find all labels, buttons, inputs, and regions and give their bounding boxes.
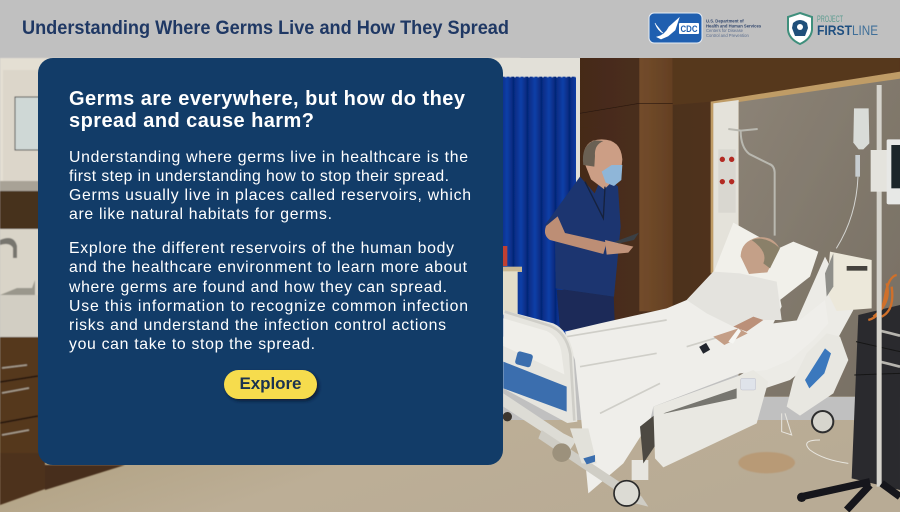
cable on floor [782,413,848,463]
first paragraph: Germs usually live in places called reservoirs, which [69,187,471,204]
mask [602,165,622,186]
pillow [713,223,818,300]
floor [0,420,900,512]
patient head [741,237,780,274]
first paragraph: first step in understanding how to stop their spread. [69,168,449,185]
healthcare worker [545,139,639,330]
panel heading: Germs are everywhere, but how do they [69,88,466,110]
second paragraph: Explore the different reservoirs of the human body [69,240,454,257]
main text panel [38,58,503,465]
CDC logo: Health and Human Services [706,24,762,28]
Project Firstline logo [788,13,878,44]
arms [545,216,607,254]
Explore button: Explore [240,374,302,393]
tablet [615,233,639,243]
CDC logo: Centers for Disease [706,28,744,33]
right scene drawn in zoomed coordinates [500,58,900,510]
bed alcove wall [739,79,900,397]
bedside side table [503,246,522,315]
CDC logo [649,13,762,43]
dark drawer unit [852,305,900,490]
bed alcove frame [711,72,900,397]
IV pole and stand [797,85,900,510]
legs [557,287,615,330]
Project Firstline logo: FIRST [817,22,852,38]
left kitchen counter and cabinets [0,58,520,505]
upper wall [500,58,582,331]
Explore button [224,370,319,401]
floor light patch [738,452,795,473]
bed head mattress [733,257,853,390]
wall rail [728,129,775,236]
Project Firstline logo: PROJECT [817,14,843,25]
header bar [0,0,900,57]
foot mattress [503,318,573,373]
first paragraph [69,149,471,223]
headwall outlets [718,149,736,213]
IV bag and tube [836,108,869,248]
Project Firstline logo: LINE [852,22,878,38]
scrub top [545,173,621,297]
panel heading [69,88,466,132]
bed undercarriage and wheels [503,393,833,507]
foot board [503,310,577,423]
head [583,139,622,189]
patient gown and sheets [565,272,828,493]
title: Understanding Where Germs Live and How They Spread [22,18,509,39]
second paragraph: risks and understand the infection control actions [69,317,446,334]
first paragraph: are like natural habitats for germs. [69,206,332,223]
headwall column [713,100,739,273]
CDC logo: U.S. Department of [706,18,744,24]
CDC logo: CDC [680,24,698,34]
second paragraph: and the healthcare environment to learn more about [69,259,468,276]
patient monitor [871,139,900,204]
CDC logo: Control and Prevention [706,33,750,38]
wood wall panels [580,58,900,345]
head control panel [787,333,848,416]
first paragraph: Understanding where germs live in healthcare is the [69,149,468,166]
bed side rail [653,370,768,467]
blue curtain [500,77,576,337]
second paragraph: where germs are found and how they can spread. [68,279,447,296]
panel heading: spread and cause harm? [69,110,314,132]
orange cable [868,275,897,320]
second paragraph: Use this information to recognize common infection [69,298,468,315]
second paragraph: you can take to stop the spread. [69,336,315,353]
second paragraph [68,240,468,353]
infusion pump [825,252,872,311]
